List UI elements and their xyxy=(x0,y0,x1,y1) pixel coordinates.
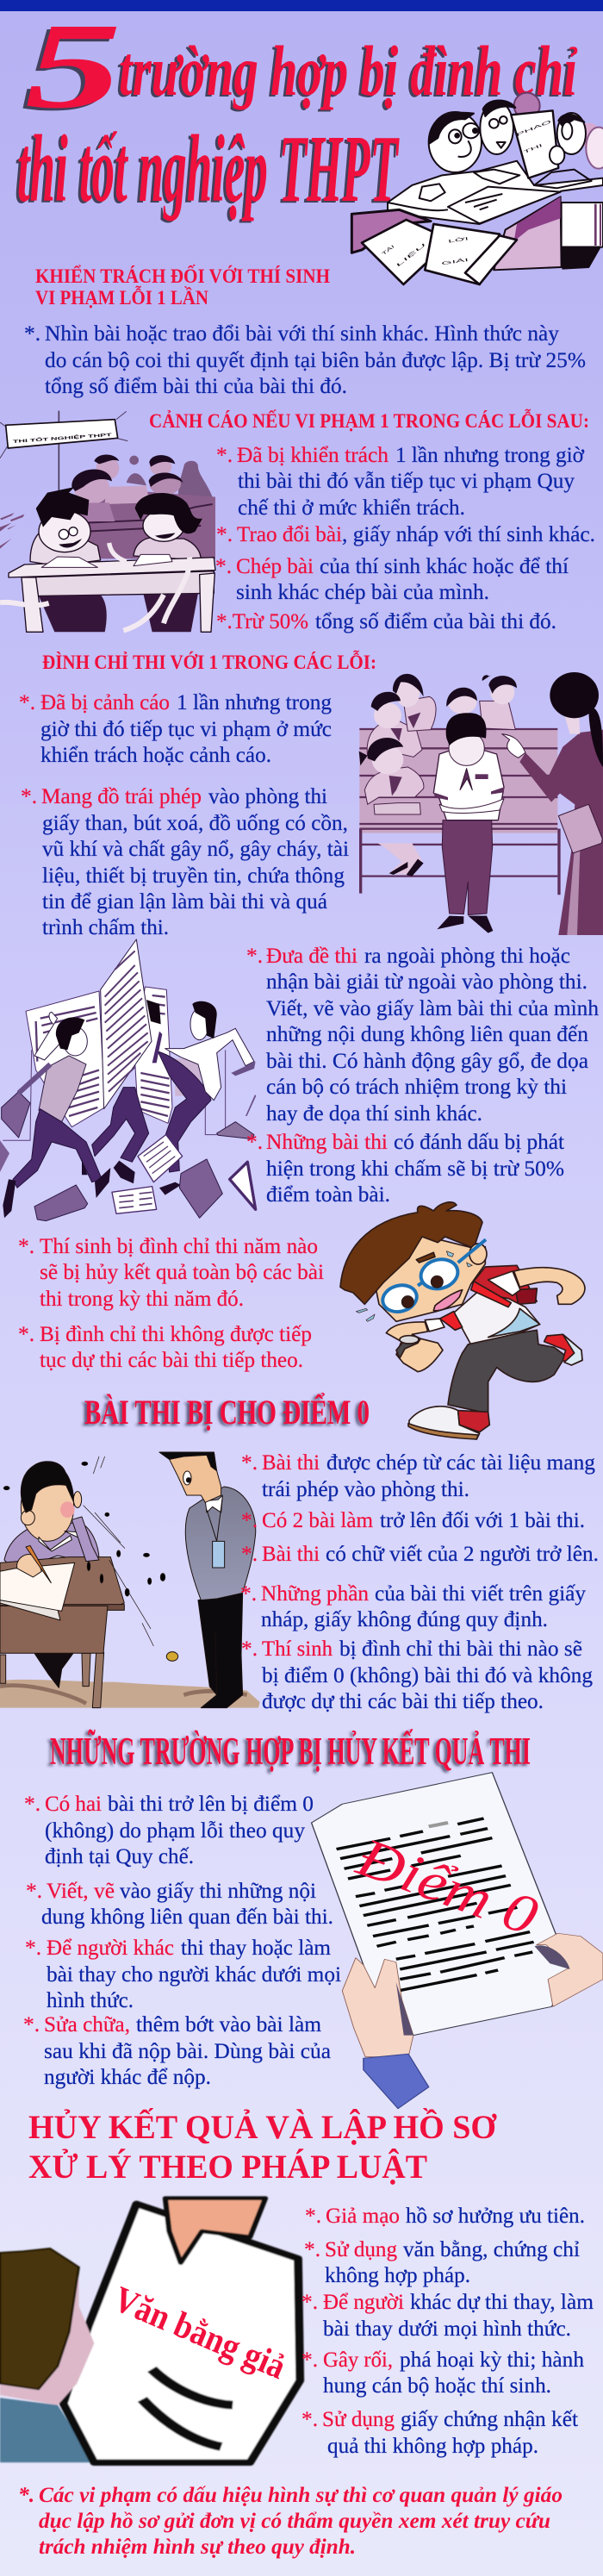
text block: reprimand: *. xyxy=(24,321,40,346)
text block: legal file cases xyxy=(302,2203,594,2458)
top band xyxy=(0,0,603,11)
text block: reprimand xyxy=(24,321,586,398)
illustration: students cheating at the desk: PHAO xyxy=(515,119,552,138)
illustration: running boy with glasses xyxy=(340,1202,585,1439)
text block: zero score rules: Bài thi xyxy=(262,1450,320,1475)
text block: suspension rules left: Đã bị cảnh cáo xyxy=(40,689,170,714)
text block: cancelled results rules: *. xyxy=(24,1791,40,1816)
text block: zero score rules: của bài thi viết trên giấy xyxy=(375,1581,586,1606)
text block: cancelled results rules: thi thay hoặc làm xyxy=(181,1935,331,1960)
text block: consequences of suspension: sẽ bị hủy kết quả toàn bộ các bài xyxy=(40,1259,324,1284)
text block: legal file cases: Để người xyxy=(323,2289,404,2314)
text block: zero score rules: Có 2 bài làm xyxy=(262,1507,373,1532)
heading: cancel and legal file: XỬ LÝ THEO PHÁP LUẬT xyxy=(28,2148,427,2186)
text block: suspension rules left: 1 lần nhưng trong xyxy=(177,689,332,714)
text block: warning rules: 1 lần nhưng trong giờ xyxy=(395,442,585,467)
text block: cancelled results rules: *. xyxy=(23,2012,40,2036)
text block: cancelled results rules: *. xyxy=(26,1878,42,1903)
illustration: students cheating at the desk xyxy=(351,93,603,284)
text block: legal file cases: hung cán bộ hoặc thí sinh. xyxy=(323,2373,551,2398)
text block: zero score rules: trở lên đối với 1 bài thi. xyxy=(380,1507,585,1532)
text block: suspension rules right: Viết, vẽ vào giấy làm bài thi của mình xyxy=(266,995,599,1020)
text block: suspension rules left: Mang đồ trái phép xyxy=(41,783,202,808)
text block: legal file cases: phá hoại kỳ thi; hành xyxy=(400,2347,584,2372)
text block: consequences of suspension: *. xyxy=(18,1321,34,1346)
text block: criminal liability note xyxy=(18,2482,563,2559)
title: 5 xyxy=(21,0,117,136)
text block: consequences of suspension: Thí sinh bị đình chỉ thi năm nào xyxy=(40,1233,318,1258)
text block: consequences of suspension: Bị đình chỉ thi không được tiếp xyxy=(40,1321,312,1346)
text block: suspension rules right: có đánh dấu bị phát xyxy=(394,1129,564,1154)
text block: legal file cases: giấy chứng nhận kết xyxy=(401,2406,578,2431)
text block: cancelled results rules: định tại Quy chế. xyxy=(45,1843,194,1868)
illustration: students cheating at the desk: TÀI xyxy=(381,243,395,257)
illustration: exam room with paper strips xyxy=(0,411,215,632)
text block: warning rules: chế thi ở mức khiển trách. xyxy=(238,495,465,520)
text block: suspension rules left: vũ khí và chất gây nổ, gây cháy, tài xyxy=(42,836,349,861)
text block: zero score rules: *. xyxy=(241,1636,258,1661)
text block: zero score rules: bị đình chỉ thi bài thi nào sẽ xyxy=(339,1636,582,1661)
text block: cancelled results rules: thêm bớt vào bài làm xyxy=(136,2012,321,2036)
illustration: students cheating at the desk: THI xyxy=(523,143,544,155)
text block: cancelled results rules: người khác để nộp. xyxy=(44,2064,211,2089)
text block: warning rules xyxy=(215,442,595,633)
text block: warning rules: *.Trừ 50% xyxy=(216,608,308,633)
text block: warning rules: *. xyxy=(216,521,233,546)
text block: cancelled results rules: Sửa chữa, xyxy=(44,2012,130,2036)
text block: warning rules: , giấy nháp với thí sinh khác. xyxy=(342,521,595,546)
text block: cancelled results rules xyxy=(23,1791,341,2089)
text block: consequences of suspension: *. xyxy=(18,1233,34,1258)
illustration: teacher scolding a student xyxy=(359,672,603,935)
text block: suspension rules left: giờ thi đó tiếp tục vi phạm ở mức xyxy=(40,716,332,741)
text block: suspension rules left: trình chấm thi. xyxy=(42,914,169,939)
text block: legal file cases: Sử dụng xyxy=(325,2236,397,2261)
text block: consequences of suspension xyxy=(18,1233,324,1372)
text block: legal file cases: *. xyxy=(305,2203,321,2228)
text block: zero score rules: *. xyxy=(241,1541,258,1566)
text block: zero score rules: nháp, giấy không đúng quy định. xyxy=(261,1606,548,1631)
text block: cancelled results rules: sau khi đã nộp bài. Dùng bài của xyxy=(44,2038,331,2063)
text block: suspension rules left: vào phòng thi xyxy=(208,783,327,808)
text block: suspension rules left: liệu, thiết bị truyền tin, chứa thông xyxy=(42,863,345,888)
text block: warning rules: *. xyxy=(216,442,233,467)
text block: reprimand: do cán bộ coi thi quyết định tại biên bản được lập. Bị trừ 25% xyxy=(45,347,586,372)
text block: cancelled results rules: Để người khác xyxy=(47,1935,174,1960)
text block: suspension rules right: những nội dung không liên quan đến xyxy=(266,1021,588,1046)
heading: zero score: BÀI THI BỊ CHO ĐIỂM 0 xyxy=(84,1392,370,1431)
text block: suspension rules right: Đưa đề thi xyxy=(266,943,357,968)
text block: cancelled results rules: dung không liên quan đến bài thi. xyxy=(41,1904,333,1929)
illustration: fake diploma: Văn bằng giả xyxy=(108,2280,291,2387)
text block: legal file cases: khác dự thi thay, làm xyxy=(410,2289,594,2314)
text block: zero score rules: *. xyxy=(240,1581,257,1606)
text block: warning rules: Chép bài xyxy=(236,553,314,578)
text block: zero score rules: Những phần xyxy=(261,1581,369,1606)
text block: cancelled results rules: Có hai xyxy=(45,1791,102,1816)
text block: suspension rules right: nhận bài giải từ ngoài vào phòng thi. xyxy=(266,969,587,994)
illustration: hands holding a test paper marked zero xyxy=(312,1773,603,2109)
text block: suspension rules right: điểm toàn bài. xyxy=(266,1182,390,1207)
text block: suspension rules right: ra ngoài phòng thi hoặc xyxy=(364,943,570,968)
text block: suspension rules right: *. xyxy=(246,1129,263,1154)
text block: legal file cases: *. xyxy=(304,2236,320,2261)
text block: cancelled results rules: bài thay cho người khác dưới mọi xyxy=(47,1962,341,1987)
text block: suspension rules left: giấy than, bút xoá, đồ uống có cồn, xyxy=(42,810,348,835)
text block: legal file cases: bài thay dưới mọi hình thức. xyxy=(323,2316,571,2341)
text block: reprimand: tổng số điểm bài thi của bài thi đó. xyxy=(45,373,347,398)
text block: criminal liability note: *. xyxy=(18,2482,34,2507)
illustration: students cheating at the desk: LỜI xyxy=(448,235,469,245)
heading: cancel and legal file: HỦY KẾT QUẢ VÀ LẬP HỒ SƠ xyxy=(28,2106,497,2146)
text block: legal file cases: Sử dụng xyxy=(322,2406,395,2431)
text block: legal file cases: văn bằng, chứng chỉ xyxy=(403,2236,580,2261)
title: 5 xyxy=(25,0,121,134)
illustration: hands holding a test paper marked zero: Điểm 0 xyxy=(349,1825,545,1947)
text block: suspension rules left xyxy=(19,689,349,939)
text block: zero score rules: *. xyxy=(241,1450,258,1475)
text block: zero score rules: Thí sinh xyxy=(262,1636,333,1661)
heading: reprimand: VI PHẠM LỖI 1 LẦN xyxy=(35,285,208,309)
text block: legal file cases: quả thi không hợp pháp. xyxy=(327,2433,538,2458)
illustration: students cheating at the desk: LIỆU xyxy=(395,240,428,269)
heading: reprimand xyxy=(35,265,330,309)
text block: reprimand: Nhìn bài hoặc trao đổi bài với thí sinh khác. Hình thức này xyxy=(45,321,559,346)
text block: warning rules: sinh khác chép bài của mình. xyxy=(236,579,489,604)
illustration: exam room with paper strips: THI TỐT NGHIỆP THPT xyxy=(13,431,112,445)
text block: suspension rules left: tin để gian lận làm bài thi và quá xyxy=(42,889,327,914)
text block: legal file cases: hồ sơ hưởng ưu tiên. xyxy=(406,2203,585,2228)
text block: suspension rules left: *. xyxy=(19,689,35,714)
text block: warning rules: *. xyxy=(215,553,232,578)
text block: cancelled results rules: vào giấy thi những nội xyxy=(120,1878,316,1903)
text block: zero score rules: được chép từ các tài liệu mang xyxy=(326,1450,595,1475)
heading: reprimand: KHIỂN TRÁCH ĐỐI VỚI THÍ SINH xyxy=(35,265,330,287)
text block: zero score rules: Bài thi xyxy=(262,1541,320,1566)
text block: zero score rules: bị điểm 0 (không) bài thi đó và không xyxy=(262,1662,593,1687)
text block: legal file cases: *. xyxy=(302,2347,318,2372)
text block: warning rules: tổng số điểm của bài thi đó. xyxy=(315,608,556,633)
heading: cancel and legal file xyxy=(28,2106,497,2186)
text block: cancelled results rules: (không) do phạm lỗi theo quy xyxy=(45,1818,305,1843)
illustration: fight with flying papers xyxy=(0,939,256,1221)
illustration: sneezing candidate and examiner xyxy=(0,1452,260,1708)
text block: suspension rules right: *. xyxy=(246,943,263,968)
text block: suspension rules left: *. xyxy=(21,783,37,808)
text block: consequences of suspension: tục dự thi các bài thi tiếp theo. xyxy=(40,1347,303,1372)
text block: zero score rules: có chữ viết của 2 người trở lên. xyxy=(326,1541,599,1566)
text block: cancelled results rules: *. xyxy=(25,1935,41,1960)
text block: cancelled results rules: Viết, vẽ xyxy=(47,1878,115,1903)
text block: suspension rules right: hiện trong khi chấm sẽ bị trừ 50% xyxy=(266,1156,564,1181)
text block: zero score rules: *. xyxy=(241,1507,258,1532)
text block: warning rules: của thí sinh khác hoặc để thí xyxy=(320,553,569,578)
text block: zero score rules: trái phép vào phòng thi. xyxy=(262,1476,469,1501)
text block: suspension rules right: cán bộ có trách nhiệm trong kỳ thi xyxy=(266,1074,567,1099)
text block: legal file cases: Giả mạo xyxy=(326,2203,400,2228)
text block: consequences of suspension: thi trong kỳ thi năm đó. xyxy=(40,1286,244,1311)
illustration: fake diploma xyxy=(0,2199,300,2462)
text block: cancelled results rules: hình thức. xyxy=(47,1987,134,2012)
text block: legal file cases: *. xyxy=(302,2289,318,2314)
text block: suspension rules right xyxy=(246,943,599,1207)
title xyxy=(15,0,578,224)
text block: criminal liability note: Các vi phạm có dấu hiệu hình sự thì cơ quan quản lý giáo xyxy=(39,2482,563,2507)
text block: zero score rules: được dự thi các bài thi tiếp theo. xyxy=(262,1688,544,1713)
text block: suspension rules right: hay đe dọa thí sinh khác. xyxy=(266,1101,482,1126)
text block: warning rules: Đã bị khiển trách xyxy=(237,442,389,467)
text block: criminal liability note: trách nhiệm hình sự theo quy định. xyxy=(39,2534,356,2559)
text block: warning rules: thi bài thi đó vẫn tiếp tục vi phạm Quy xyxy=(238,468,575,493)
illustration: students cheating at the desk: GIẢI xyxy=(441,257,469,266)
text block: criminal liability note: dục lập hồ sơ gửi đơn vị có thẩm quyền xem xét truy cứu xyxy=(39,2508,550,2533)
text block: cancelled results rules: bài thi trở lên bị điểm 0 xyxy=(108,1791,314,1816)
text block: legal file cases: Gây rối, xyxy=(323,2347,393,2372)
text block: suspension rules right: bài thi. Có hành động gây gổ, đe dọa xyxy=(266,1048,588,1073)
text block: warning rules: Trao đổi bài xyxy=(237,521,342,546)
heading: suspension: ĐÌNH CHỈ THI VỚI 1 TRONG CÁC LỖI: xyxy=(42,650,376,673)
text block: legal file cases: *. xyxy=(302,2406,318,2431)
text block: suspension rules right: Những bài thi xyxy=(266,1129,388,1154)
text block: suspension rules left: khiển trách hoặc cảnh cáo. xyxy=(40,742,271,767)
text block: zero score rules xyxy=(240,1450,599,1713)
text block: legal file cases: không hợp pháp. xyxy=(325,2262,470,2287)
